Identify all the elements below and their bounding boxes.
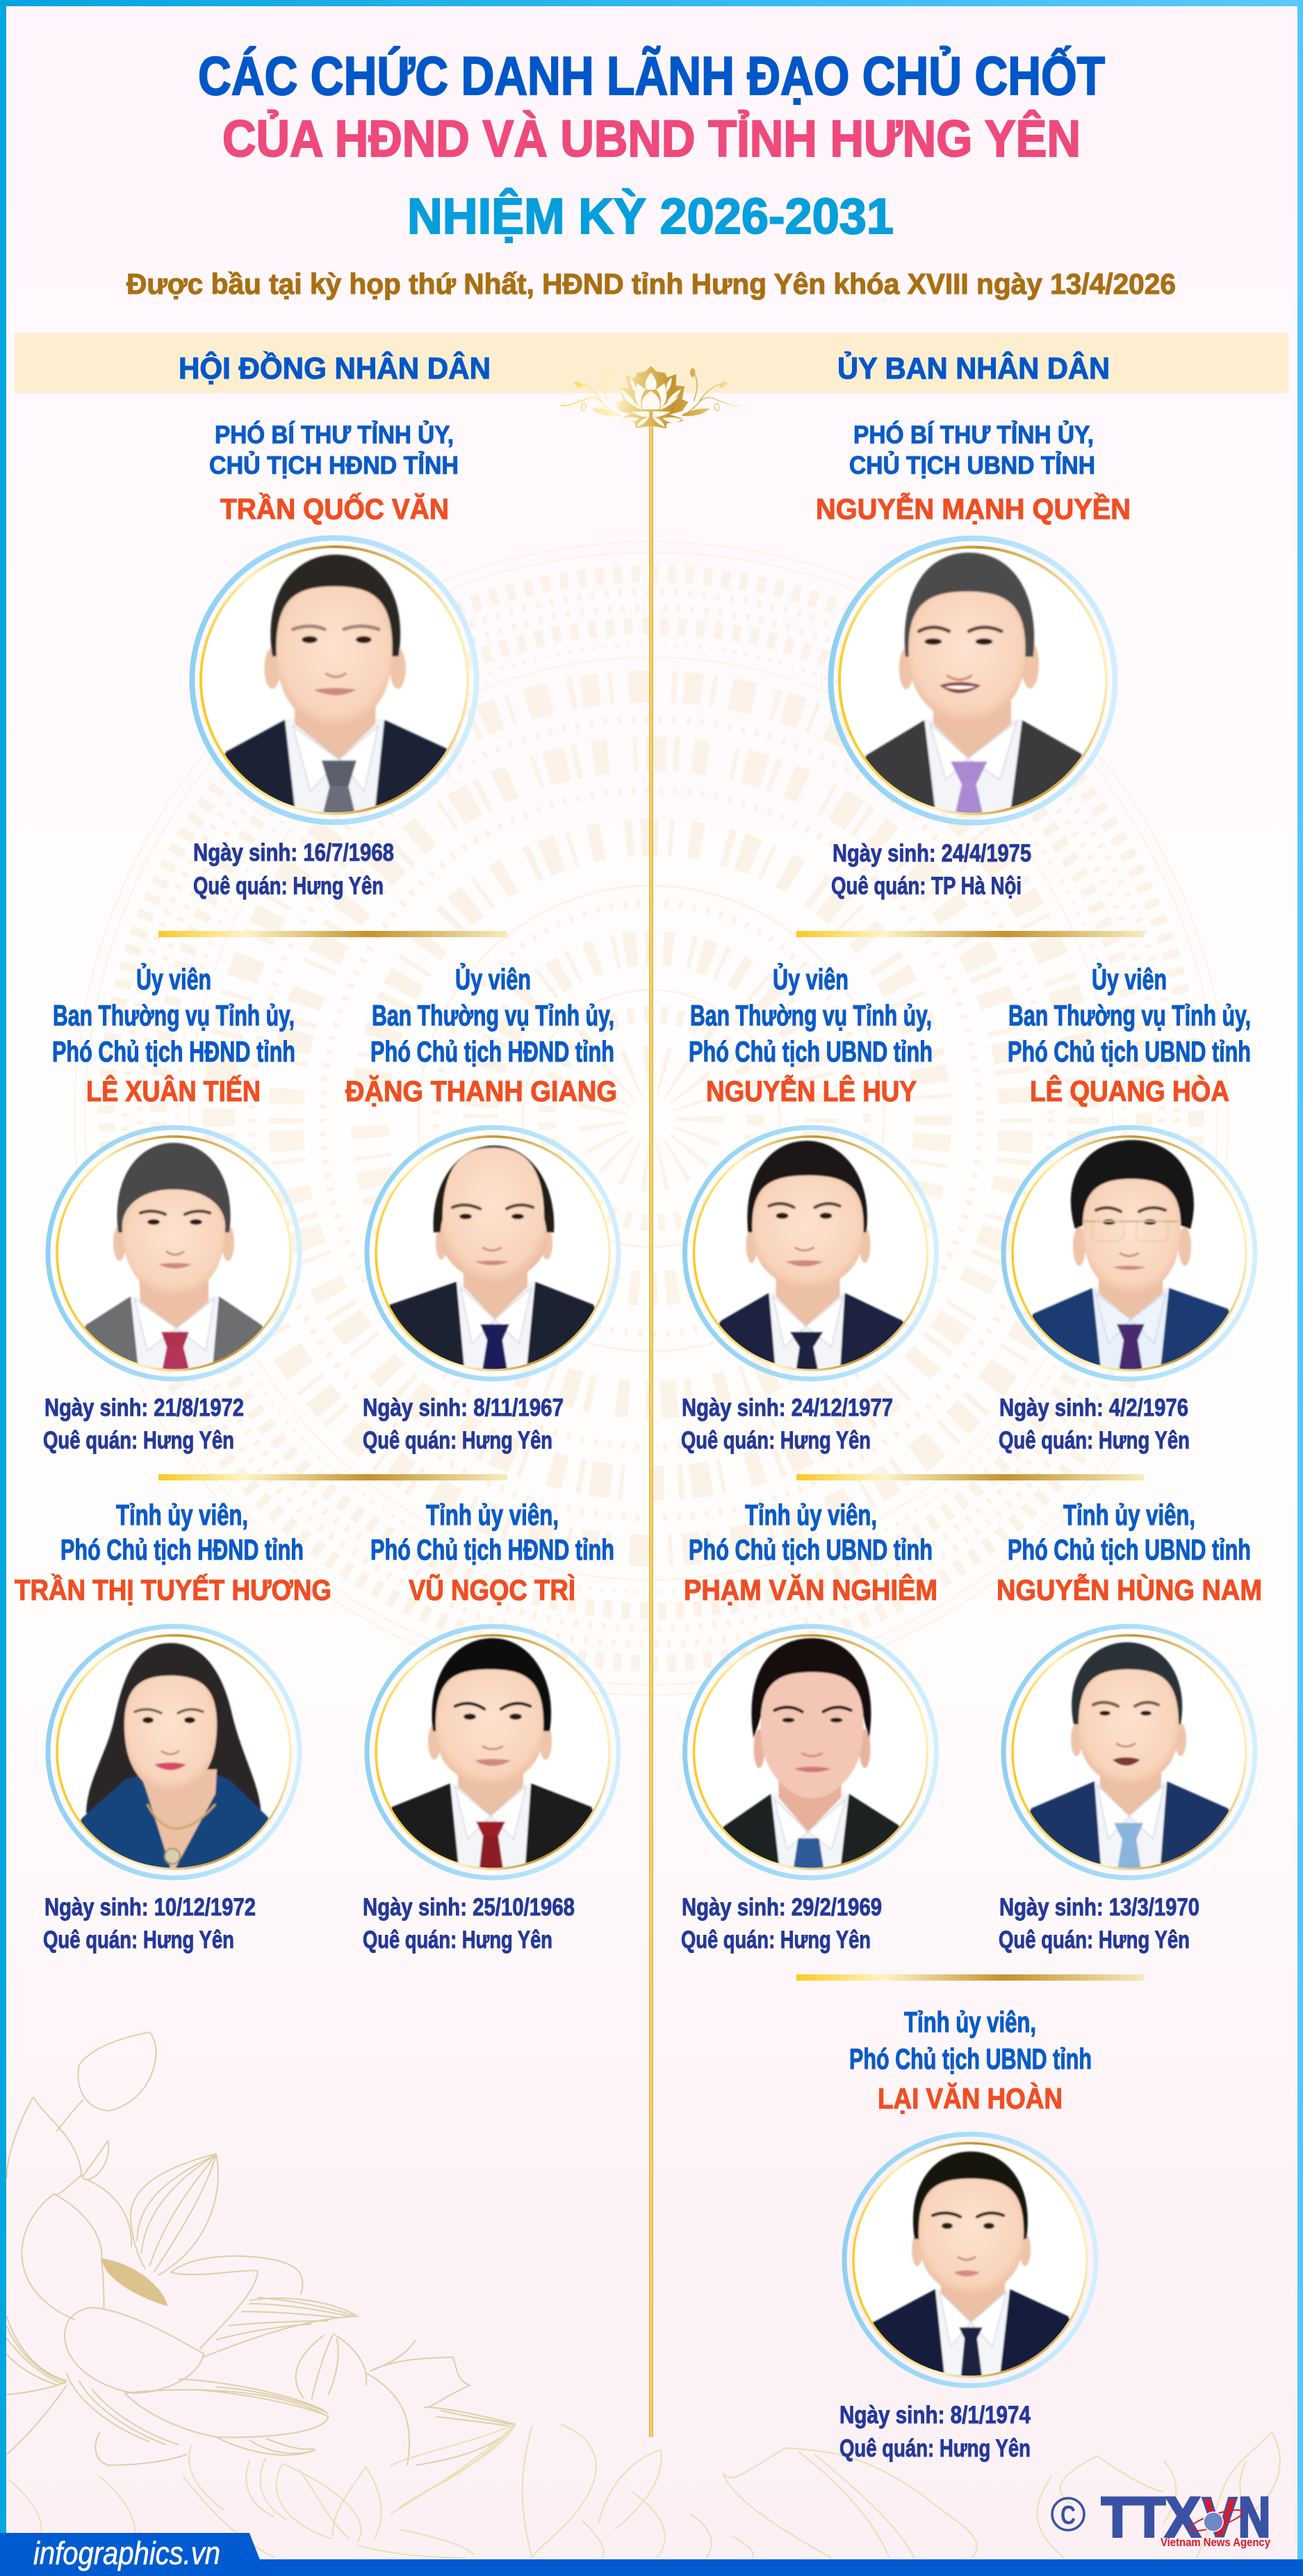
name: NGUYỄN LÊ HUY (706, 1074, 917, 1107)
card: Phạm Văn Nghiêm (678, 1498, 942, 1954)
birth info: Ngày sinh: 13/3/1970 (999, 1894, 1199, 1921)
birth info: Ngày sinh: 25/10/1968 (363, 1894, 575, 1921)
portrait (822, 538, 1124, 839)
portrait (361, 1128, 625, 1392)
portrait (997, 1128, 1261, 1392)
birth info: Quê quán: TP Hà Nội (831, 873, 1022, 900)
logo wordmark (1101, 2486, 1270, 2549)
birth info: Ngày sinh: 16/7/1968 (193, 839, 394, 866)
birth info: Quê quán: Hưng Yên (193, 873, 384, 900)
role: Tỉnh ủy viên, (745, 1498, 877, 1531)
name: ĐẶNG THANH GIANG (345, 1075, 617, 1107)
birth info: Quê quán: Hưng Yên (681, 1427, 871, 1454)
footer tab infographics.vn (0, 2533, 266, 2576)
birth info: Quê quán: Hưng Yên (363, 1427, 552, 1454)
column header band (15, 333, 1288, 393)
role: PHÓ BÍ THƯ TỈNH ỦY, (215, 420, 454, 449)
role: Tỉnh ủy viên, (116, 1498, 248, 1531)
role: Tỉnh ủy viên, (1063, 1498, 1195, 1531)
birth info (831, 840, 1031, 900)
card: Lê Quang Hòa (997, 962, 1261, 1454)
icon: golden lotus (561, 366, 740, 429)
birth info: Quê quán: Hưng Yên (999, 1427, 1190, 1454)
role: Phó Chủ tịch UBND tỉnh (849, 2042, 1092, 2075)
birth info: Ngày sinh: 24/4/1975 (833, 840, 1031, 867)
title line 2: CỦA HĐND VÀ UBND TỈNH HƯNG YÊN (222, 110, 1081, 167)
role (849, 420, 1095, 479)
role: Phó Chủ tịch HĐND tỉnh (60, 1533, 304, 1566)
role: CHỦ TỊCH HĐND TỈNH (209, 450, 459, 479)
birth info: Ngày sinh: 8/1/1974 (839, 2402, 1031, 2429)
birth info: Quê quán: Hưng Yên (43, 1926, 234, 1954)
role: Phó Chủ tịch UBND tỉnh (689, 1533, 933, 1566)
birth info (363, 1394, 564, 1454)
portrait (838, 2134, 1102, 2399)
title block (126, 45, 1176, 300)
card: Vũ Ngọc Trì (361, 1498, 625, 1954)
name: PHẠM VĂN NGHIÊM (684, 1573, 937, 1606)
icon: copyright (1052, 2498, 1084, 2530)
role: Ban Thường vụ Tỉnh ủy, (372, 999, 614, 1032)
birth info (193, 839, 394, 900)
name: TRẦN THỊ TUYẾT HƯƠNG (15, 1574, 331, 1606)
birth info: Quê quán: Hưng Yên (363, 1926, 552, 1954)
name: LÊ XUÂN TIẾN (86, 1074, 261, 1107)
copyright and TTXVN logo (1052, 2486, 1270, 2549)
card: Trần Thị Tuyết Hương (15, 1498, 331, 1954)
role: Tỉnh ủy viên, (904, 2006, 1036, 2038)
icon: copyright: C (1060, 2501, 1076, 2530)
role: Ủy viên (136, 962, 211, 996)
portrait (183, 538, 485, 839)
role: Tỉnh ủy viên, (426, 1498, 559, 1531)
name: NGUYỄN MẠNH QUYỀN (816, 492, 1131, 525)
role (689, 1498, 933, 1566)
card: Đặng Thanh Giang (345, 962, 625, 1454)
name: TRẦN QUỐC VĂN (220, 492, 449, 525)
birth info: Ngày sinh: 10/12/1972 (44, 1894, 256, 1921)
footer tab infographics.vn: infographics.vn (33, 2535, 220, 2571)
birth info (363, 1894, 575, 1954)
birth info: Quê quán: Hưng Yên (681, 1926, 871, 1954)
role (689, 962, 933, 1068)
birth info: Ngày sinh: 8/11/1967 (363, 1394, 564, 1421)
name: LÊ QUANG HÒA (1030, 1074, 1229, 1107)
role: Phó Chủ tịch UBND tỉnh (689, 1035, 933, 1068)
birth info: Quê quán: Hưng Yên (43, 1427, 234, 1454)
portrait (42, 1128, 306, 1392)
name: NGUYỄN HÙNG NAM (997, 1573, 1262, 1606)
name: LẠI VĂN HOÀN (878, 2082, 1063, 2115)
role (1008, 962, 1251, 1068)
bronze drum watermark (74, 542, 1228, 1695)
role (209, 420, 459, 479)
logo wordmark: TTX (1101, 2486, 1200, 2549)
center divider stem (649, 424, 653, 2437)
footer bar (0, 2559, 1303, 2576)
birth info: Ngày sinh: 24/12/1977 (682, 1394, 893, 1421)
section separator bars (158, 931, 1144, 1981)
role: Phó Chủ tịch HĐND tỉnh (370, 1035, 614, 1068)
card: Lê Xuân Tiến (42, 962, 306, 1454)
birth info: Ngày sinh: 4/2/1976 (999, 1394, 1188, 1421)
logo wordmark: N (1238, 2486, 1270, 2549)
portrait (678, 1128, 942, 1392)
role (370, 962, 614, 1068)
card: Nguyễn Hùng Nam (997, 1498, 1262, 1954)
card: Nguyễn Lê Huy (678, 962, 942, 1454)
card: Lại Văn Hoàn (838, 2006, 1102, 2462)
birth info: Ngày sinh: 29/2/1969 (682, 1894, 882, 1921)
title line 1: CÁC CHỨC DANH LÃNH ĐẠO CHỦ CHỐT (198, 45, 1105, 106)
title term: NHIỆM KỲ 2026-2031 (407, 188, 894, 245)
role: Ủy viên (1092, 962, 1167, 996)
heading right: ỦY BAN NHÂN DÂN (837, 350, 1110, 386)
portrait (361, 1626, 625, 1891)
birth info (999, 1394, 1190, 1454)
card: Nguyễn Mạnh Quyền (816, 420, 1131, 900)
birth info (681, 1894, 882, 1954)
role (60, 1498, 304, 1566)
portrait (997, 1626, 1261, 1891)
role: PHÓ BÍ THƯ TỈNH ỦY, (853, 420, 1094, 449)
portrait (678, 1626, 942, 1891)
logo wordmark: V (1202, 2486, 1237, 2549)
role: Phó Chủ tịch HĐND tỉnh (370, 1533, 614, 1566)
birth info: Ngày sinh: 21/8/1972 (44, 1394, 244, 1421)
birth info: Quê quán: Hưng Yên (839, 2435, 1031, 2462)
birth info (43, 1894, 256, 1954)
name: VŨ NGỌC TRÌ (409, 1573, 575, 1606)
portrait (42, 1626, 306, 1891)
role: Ban Thường vụ Tỉnh ủy, (690, 999, 932, 1032)
birth info (839, 2402, 1031, 2462)
birth info: Quê quán: Hưng Yên (999, 1926, 1190, 1954)
role: CHỦ TỊCH UBND TỈNH (849, 450, 1095, 479)
birth info (681, 1394, 893, 1454)
role: Phó Chủ tịch HĐND tỉnh (52, 1035, 295, 1068)
role: Ủy viên (773, 962, 849, 996)
role (52, 962, 295, 1068)
logo tagline: Vietnam News Agency (1161, 2536, 1270, 2549)
role: Ban Thường vụ Tỉnh ủy, (53, 999, 295, 1032)
role: Ủy viên (455, 962, 531, 996)
role (1008, 1498, 1251, 1566)
lotus line art (7, 2032, 1280, 2558)
birth info (999, 1894, 1199, 1954)
subtitle: Được bầu tại kỳ họp thứ Nhất, HĐND tỉnh Hưng Yên khóa XVIII ngày 13/4/2026 (126, 267, 1176, 300)
card: Trần Quốc Văn (183, 420, 485, 900)
role (370, 1498, 614, 1566)
role (849, 2006, 1092, 2075)
birth info (43, 1394, 244, 1454)
heading left: HỘI ĐỒNG NHÂN DÂN (179, 350, 491, 386)
